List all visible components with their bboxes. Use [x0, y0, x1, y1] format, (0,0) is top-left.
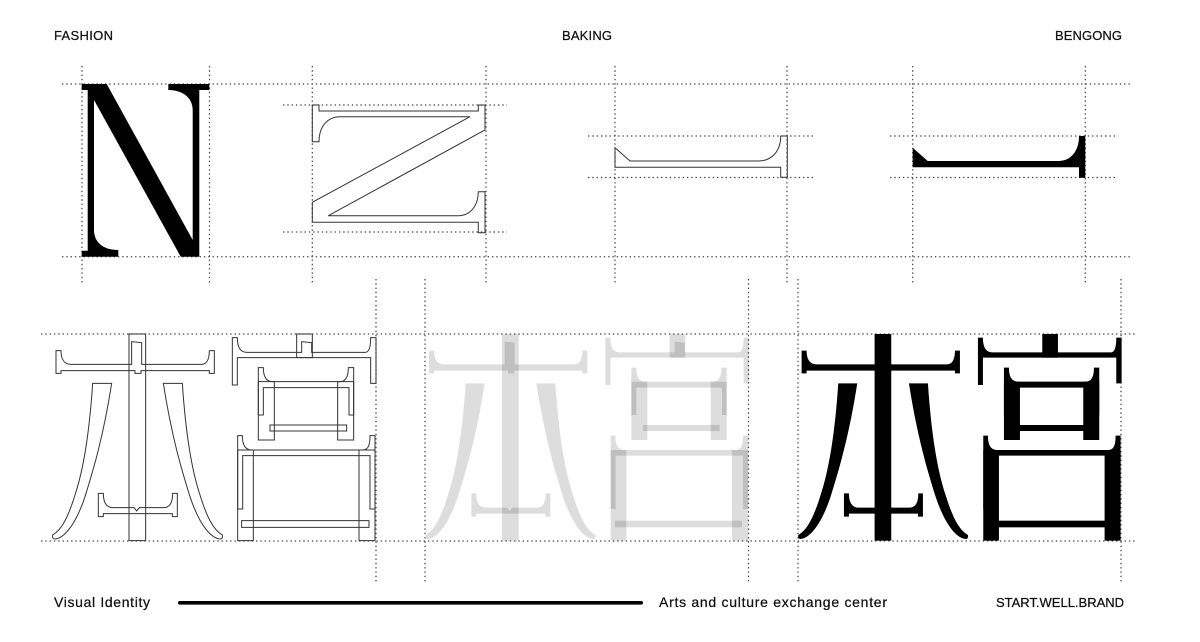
- footer rule: [178, 601, 643, 605]
- footer text: visual identity: Visual Identity: [54, 594, 150, 610]
- solid wordmark: ben: [798, 334, 968, 541]
- footer text: arts and culture: Arts and culture exchange center: [659, 594, 887, 610]
- translucent wordmark: gong: [605, 334, 749, 541]
- solid wordmark: gong: [978, 334, 1122, 541]
- outlined horizontal stroke: [615, 136, 787, 177]
- outline wordmark: gong: [232, 334, 376, 541]
- heading: fashion: FASHION: [54, 28, 113, 43]
- outline wordmark: ben: [53, 334, 222, 541]
- heading: baking: BAKING: [562, 28, 612, 43]
- outlined rotated N: [312, 105, 485, 233]
- construction grid: [41, 66, 1135, 582]
- footer text: brand: START.WELL.BRAND: [996, 595, 1124, 610]
- solid N letterform: [82, 84, 209, 257]
- solid horizontal stroke: [913, 136, 1085, 178]
- translucent wordmark: ben: [426, 334, 595, 541]
- heading: bengong: BENGONG: [1055, 28, 1122, 43]
